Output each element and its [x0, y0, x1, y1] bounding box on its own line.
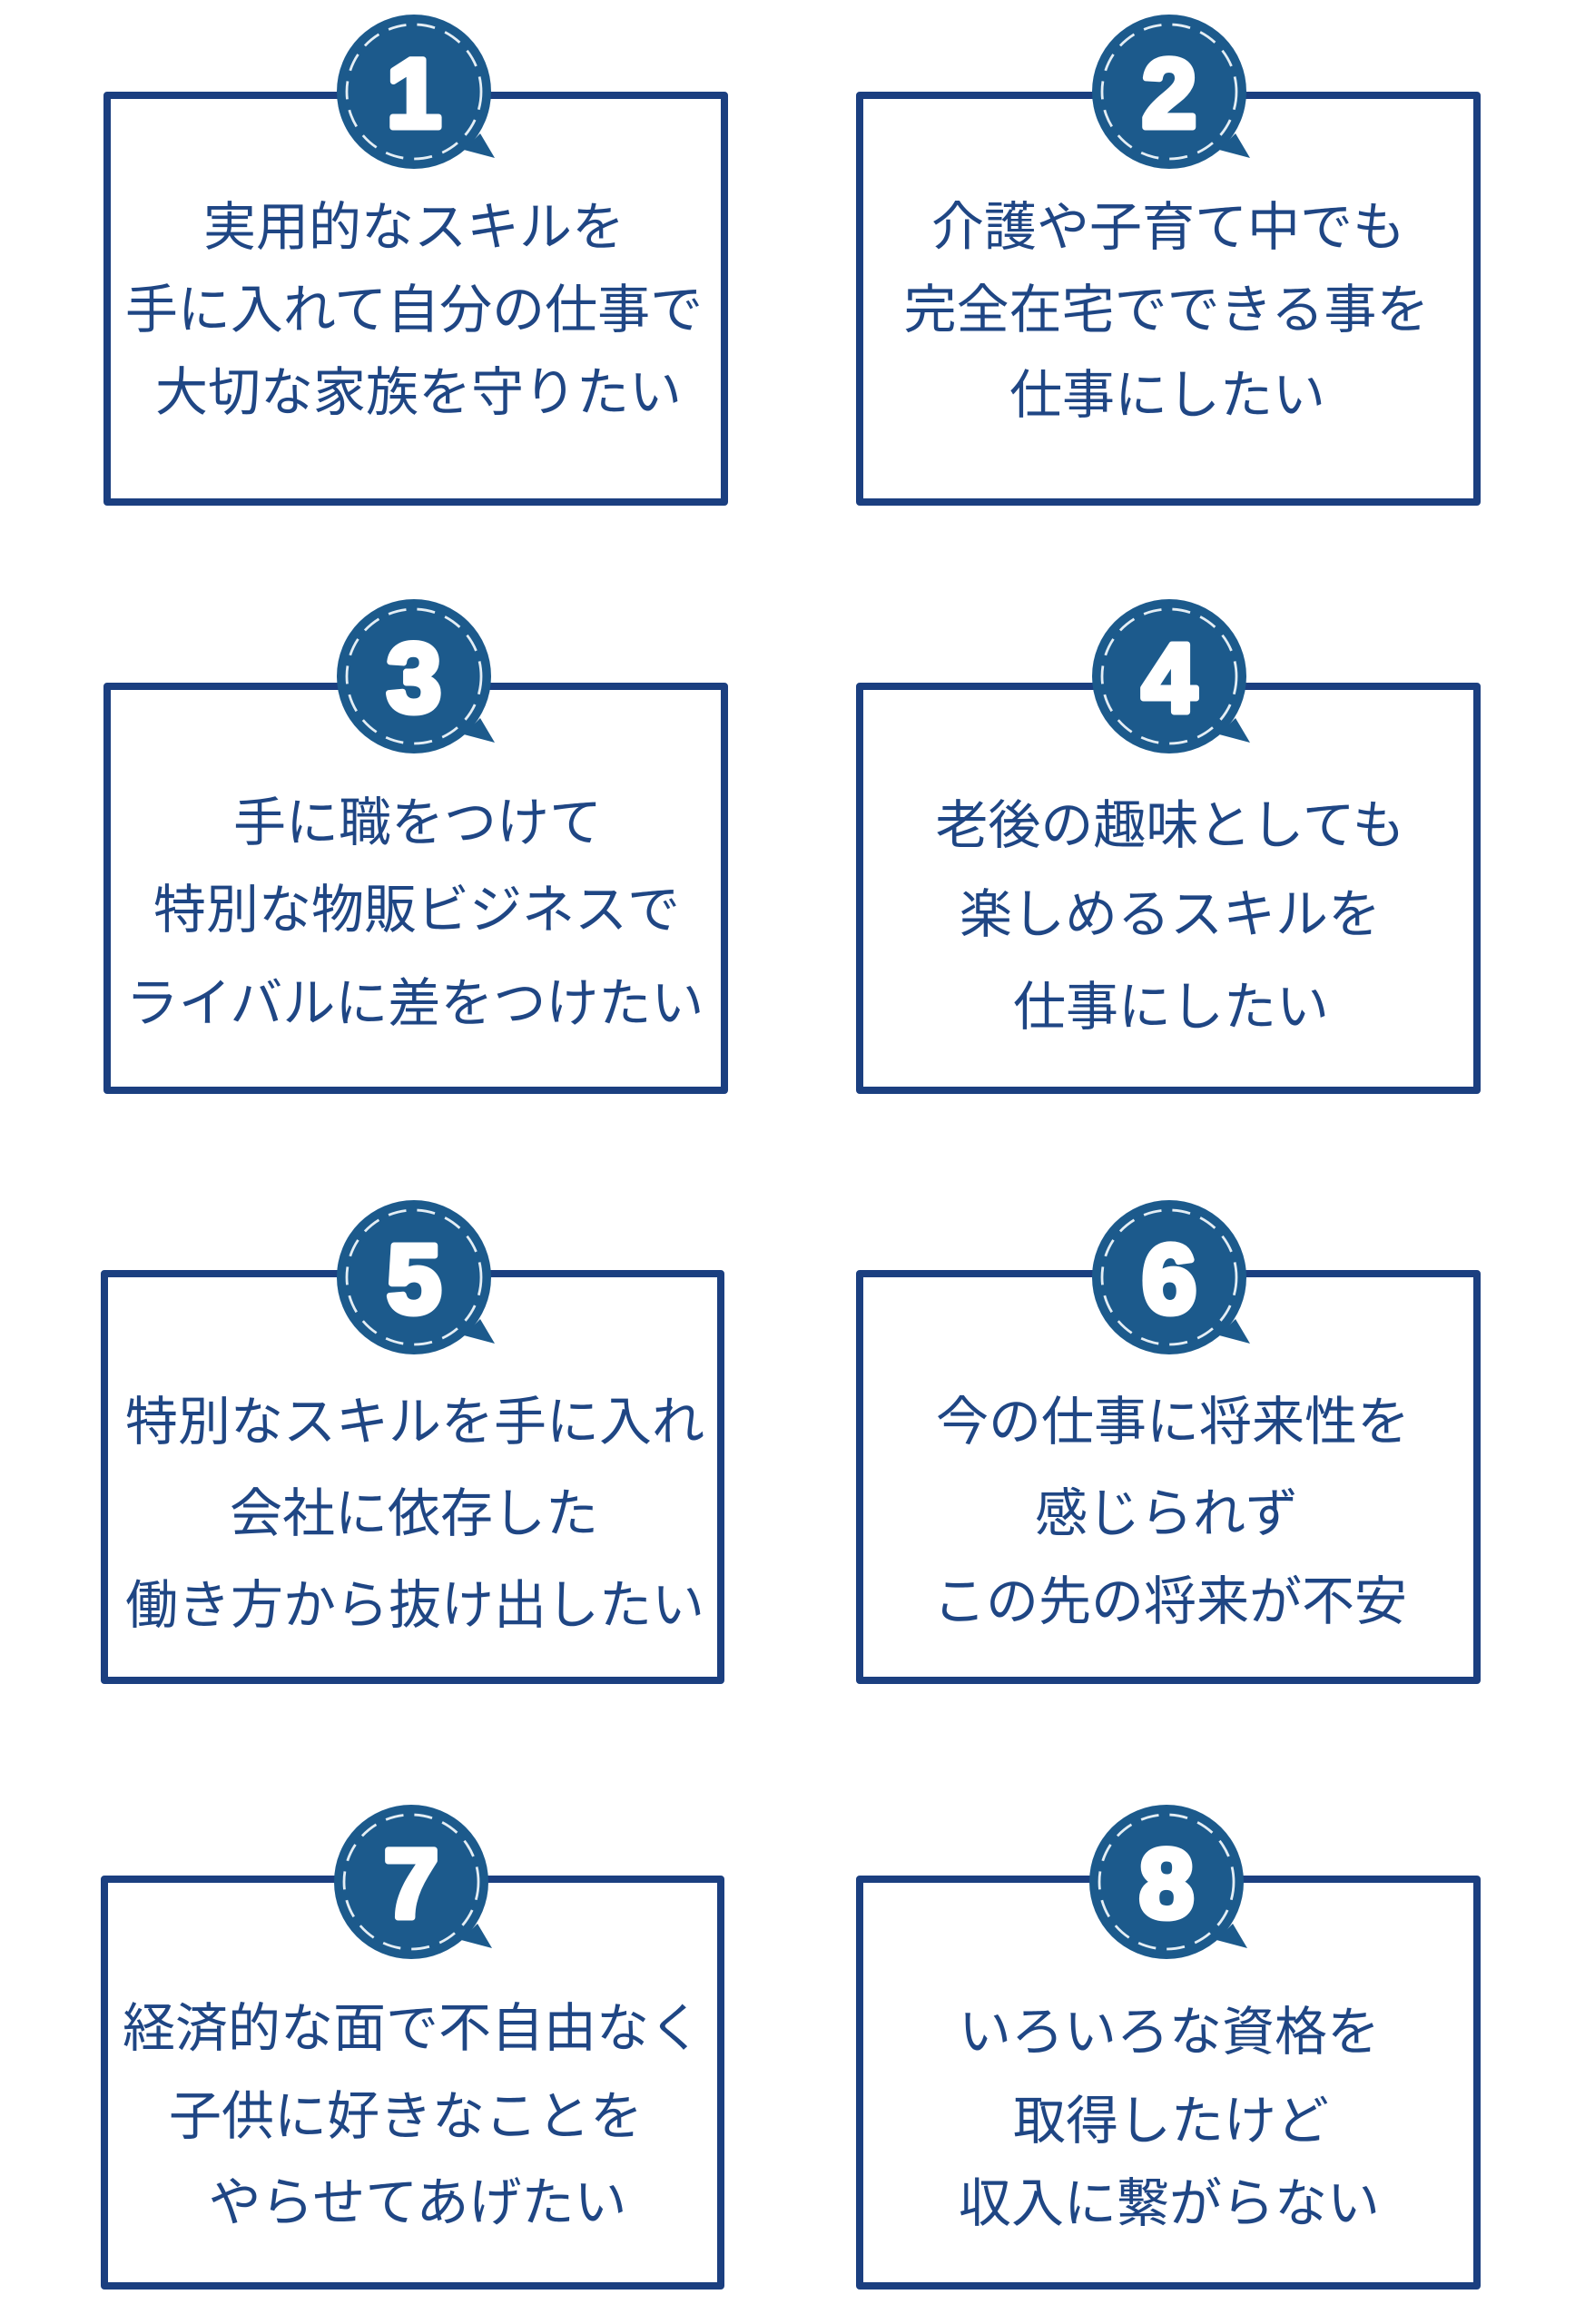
panel 1 text: 実用的なスキルを — [203, 198, 625, 257]
panel 2 frame — [860, 95, 1477, 502]
panel 6 frame — [860, 1274, 1477, 1680]
panel 1 text — [125, 198, 703, 422]
panel 4 — [860, 599, 1477, 1090]
panel 6 text — [933, 1393, 1410, 1631]
panel 4 text: 仕事にしたい — [1013, 978, 1329, 1037]
panel 2 text: 介護や子育て中でも — [931, 198, 1405, 257]
badge 7 — [334, 1805, 492, 1959]
badge 6: 6 — [1142, 1224, 1196, 1334]
panel 8 text: 収入に繋がらない — [959, 2174, 1380, 2233]
badge 5: 5 — [387, 1224, 441, 1334]
panel 7 text — [123, 1999, 702, 2232]
panel 5 frame — [104, 1274, 721, 1680]
panel 8 frame — [860, 1879, 1477, 2286]
badge 8 — [1089, 1805, 1247, 1959]
badge 7: 7 — [384, 1828, 438, 1938]
badge 6 — [1092, 1200, 1250, 1354]
panel 8 text: 取得したけど — [1013, 2092, 1329, 2151]
panel 2 text: 仕事にしたい — [1009, 366, 1325, 425]
panel 5 text — [125, 1393, 704, 1635]
panel 3 text: 手に職をつけて — [233, 793, 602, 852]
panel 2 text: 完全在宅でできる事を — [904, 281, 1429, 340]
panel 5 — [104, 1200, 721, 1680]
panel 4 frame — [860, 686, 1477, 1090]
panel 6 text: 感じられず — [1035, 1484, 1298, 1543]
panel 7 text: 子供に好きなことを — [169, 2087, 643, 2146]
panel 7 text: やらせてあげたい — [208, 2173, 627, 2232]
badge 3: 3 — [387, 623, 441, 733]
badge 5 — [337, 1200, 495, 1354]
panel 5 text: 会社に依存した — [230, 1484, 598, 1543]
panel 1 text: 大切な家族を守りたい — [155, 363, 682, 422]
panel 6 text: 今の仕事に将来性を — [936, 1393, 1410, 1452]
badge 1 — [337, 15, 495, 169]
panel 8 text: いろいろな資格を — [959, 2003, 1380, 2062]
panel 3 — [107, 599, 724, 1090]
panel 6 — [860, 1200, 1477, 1680]
panel 1 — [107, 15, 724, 502]
badge 4 — [1092, 599, 1250, 753]
panel 7 — [104, 1805, 721, 2286]
badge 2: 2 — [1142, 38, 1196, 148]
panel 4 text — [935, 796, 1405, 1037]
badge 3 — [337, 599, 495, 753]
badge 2 — [1092, 15, 1250, 169]
panel 7 frame — [104, 1879, 721, 2286]
panel 6 text: この先の将来が不安 — [933, 1572, 1407, 1631]
panel 4 text: 楽しめるスキルを — [960, 885, 1381, 944]
panel 1 text: 手に入れて自分の仕事で — [125, 281, 703, 340]
panel 4 text: 老後の趣味としても — [935, 796, 1405, 855]
panel 2 text — [904, 198, 1429, 425]
panel 5 text: 特別なスキルを手に入れ — [125, 1393, 704, 1452]
panel 1 frame — [107, 95, 724, 502]
panel 3 frame — [107, 686, 724, 1090]
badge 8: 8 — [1139, 1828, 1194, 1938]
panel 3 text: 特別な物販ビジネスで — [153, 881, 680, 940]
panel 8 — [860, 1805, 1477, 2286]
panel 3 text: ライバルに差をつけたい — [126, 974, 704, 1033]
panel 3 text — [126, 793, 704, 1033]
badge 1: 1 — [387, 38, 441, 148]
panel 8 text — [959, 2003, 1380, 2233]
panel 2 — [860, 15, 1477, 502]
badge 4: 4 — [1142, 623, 1196, 733]
panel 5 text: 働き方から抜け出したい — [125, 1576, 704, 1635]
panel 7 text: 経済的な面で不自由なく — [123, 1999, 702, 2058]
